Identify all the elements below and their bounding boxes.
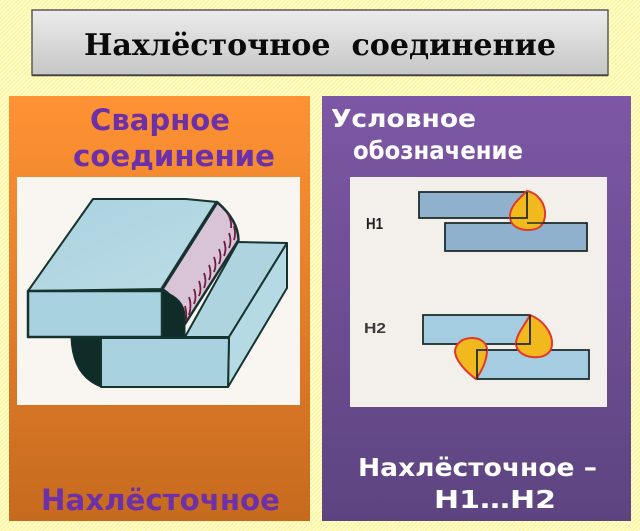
H2 cross-section — [364, 315, 589, 379]
caption: designation range — [358, 453, 597, 514]
diagram: weld cross-sections — [350, 177, 607, 407]
caption: designation range: Н1…Н2 — [434, 485, 556, 514]
H1 cross-section: Н1 — [366, 216, 383, 233]
H2 cross-section: Н2 — [364, 320, 386, 337]
heading: designation: обозначение — [353, 136, 523, 165]
heading: welded joint: Сварное — [90, 103, 230, 137]
title banner — [32, 10, 608, 76]
caption: lap joint: Нахлёсточное — [41, 483, 280, 517]
caption: designation range: Нахлёсточное – — [358, 453, 597, 482]
title banner: Нахлёсточное соединение — [84, 28, 556, 63]
heading: welded joint — [73, 103, 275, 173]
heading: welded joint: соединение — [73, 139, 275, 173]
weld ripples — [185, 214, 235, 321]
panel: symbol designation — [322, 96, 631, 521]
illustration: 3D lap joint — [17, 177, 300, 405]
H1 cross-section — [366, 191, 587, 251]
heading: designation: Условное — [331, 104, 476, 133]
panel: welded joint — [9, 96, 310, 521]
heading: designation — [331, 104, 523, 165]
